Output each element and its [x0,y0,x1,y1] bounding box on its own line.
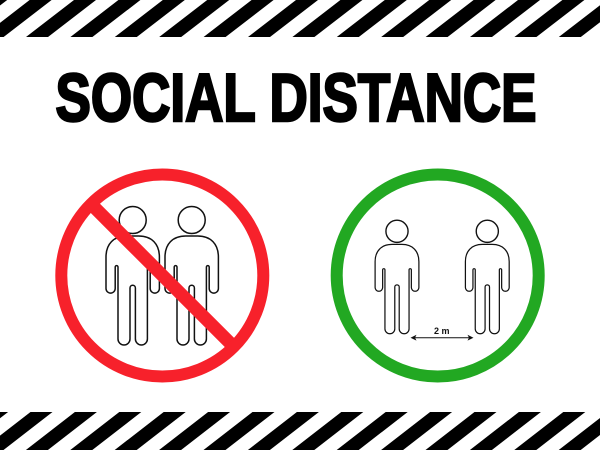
icon: green ring [337,174,539,376]
panel: correct distance [337,174,539,376]
icon: red prohibition slash [90,203,235,348]
icon: person left [106,206,159,345]
distance label: 2 m [434,326,449,336]
icon: person right [165,206,218,345]
panel: prohibited close contact [61,174,263,376]
icon: red prohibition ring [61,174,263,376]
distance arrow [410,335,474,341]
top hazard stripe band [0,0,600,37]
icon: person right [465,220,509,334]
icon: person left [375,220,419,334]
bottom hazard stripe band [0,412,600,450]
